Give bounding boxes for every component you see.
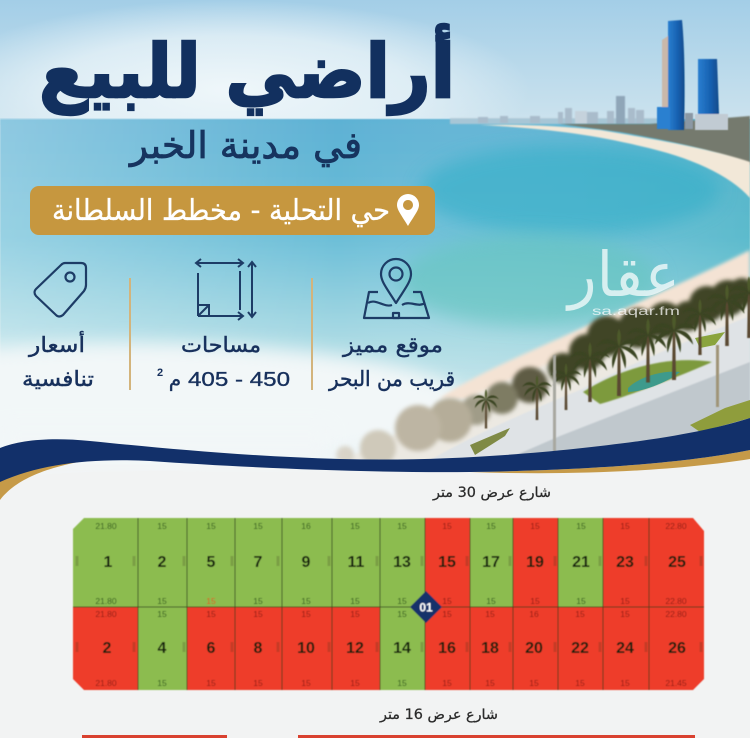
- plot 8: 8: [254, 640, 263, 657]
- plot 13: [380, 518, 425, 607]
- plot 8: [235, 607, 282, 690]
- tall blue tower: [657, 20, 728, 130]
- location pill: [30, 186, 435, 235]
- feature description: قريب من البحر: [328, 367, 455, 391]
- feature: areas: م: [169, 367, 181, 391]
- skyline: [450, 96, 670, 124]
- plot 1: 21.80: [95, 596, 117, 606]
- plot 13: 13: [393, 554, 411, 571]
- plot 7: [235, 518, 282, 607]
- feature description: 405 - 450: [188, 369, 290, 391]
- plot 22: 15: [575, 678, 585, 688]
- plot 25: [649, 518, 704, 607]
- plot 2 top: [138, 518, 187, 607]
- sand under trees: [340, 280, 750, 462]
- plot 9: 15: [301, 596, 311, 606]
- plot 4: 4: [158, 640, 167, 657]
- plot 2 top: 15: [157, 521, 167, 531]
- plot 14: 14: [393, 640, 411, 657]
- plot 2 bottom: 2: [103, 640, 112, 657]
- plot 15: 15: [438, 554, 456, 571]
- street label: 16 m: شارع عرض 16 متر: [379, 707, 498, 723]
- icon: map pin on map: [364, 259, 429, 318]
- plot 20: 20: [525, 640, 543, 657]
- plot 16: 16: [438, 640, 456, 657]
- plot 2 bottom: 21.80: [95, 609, 117, 619]
- plot 7: 15: [253, 521, 263, 531]
- plot 10: 10: [297, 640, 315, 657]
- road: [500, 362, 750, 462]
- plot 9: [282, 518, 332, 607]
- plot 14: 15: [397, 609, 407, 619]
- plot 14: 15: [397, 678, 407, 688]
- plot 16: [425, 607, 470, 690]
- plot map: [73, 518, 704, 690]
- palm trees: [473, 276, 750, 452]
- plot 4: 15: [157, 678, 167, 688]
- plot 26: 21.45: [665, 678, 687, 688]
- plot marker 01: [410, 591, 442, 623]
- promenade land: [430, 316, 750, 462]
- feature: areas: 2: [157, 367, 163, 379]
- divider: [311, 278, 313, 390]
- left fog: [0, 425, 330, 465]
- feature: location: [328, 259, 455, 391]
- plot 24: 24: [616, 640, 634, 657]
- plot 20: [513, 607, 558, 690]
- plot 25: 22.80: [665, 596, 687, 606]
- feature heading: موقع مميز: [342, 333, 443, 357]
- plot 5: 5: [207, 554, 216, 571]
- watermark: عقار: [565, 238, 680, 311]
- plot 24: 15: [620, 609, 630, 619]
- icon: measured plot: [196, 259, 256, 320]
- plot 7: 15: [253, 596, 263, 606]
- plot 24: 15: [620, 678, 630, 688]
- plot 21: [558, 518, 603, 607]
- feature: areas: [157, 259, 290, 391]
- plot 24: [603, 607, 649, 690]
- watermark: sa.aqar.fm: [592, 304, 680, 318]
- plot 11: 15: [350, 596, 360, 606]
- plot 18: 15: [485, 609, 495, 619]
- plot 1: [73, 518, 138, 607]
- plot 12: [332, 607, 380, 690]
- title: أراضي للبيع: [39, 23, 455, 115]
- plot 10: 15: [301, 609, 311, 619]
- lower white panel: [0, 450, 750, 738]
- plot 18: 18: [481, 640, 499, 657]
- sea: [0, 119, 750, 464]
- plot 9: 16: [301, 521, 311, 531]
- plot 11: [332, 518, 380, 607]
- plot 15: 15: [442, 596, 452, 606]
- plot 6: [187, 607, 235, 690]
- north beach: [480, 125, 750, 198]
- sky: [0, 0, 750, 125]
- plot 19: 15: [530, 596, 540, 606]
- plot 2 bottom: [73, 607, 138, 690]
- plot 22: [558, 607, 603, 690]
- plot 4: 15: [157, 609, 167, 619]
- haze behind title: [0, 0, 530, 180]
- plot 19: 19: [526, 554, 544, 571]
- background: coastal photo scene: [0, 0, 750, 467]
- plot 5: [187, 518, 235, 607]
- plot 22: 15: [575, 609, 585, 619]
- south beach: [440, 250, 750, 402]
- plot 12: 12: [346, 640, 364, 657]
- plot 23: [603, 518, 649, 607]
- plot 13: 15: [397, 521, 407, 531]
- feature: prices: [22, 263, 94, 391]
- plot 22: 22: [571, 640, 589, 657]
- second tower: [698, 59, 719, 114]
- plot 16: 15: [442, 609, 452, 619]
- feature heading: مساحات: [181, 333, 261, 357]
- plot 10: 15: [301, 678, 311, 688]
- subtitle: في مدينة الخبر: [128, 124, 362, 167]
- plot 5: 15: [206, 521, 216, 531]
- feature heading: أسعار: [28, 331, 85, 357]
- plot 17: [470, 518, 513, 607]
- plot 12: 15: [350, 609, 360, 619]
- plot 20: 15: [529, 678, 539, 688]
- next plot rows (cropped): [82, 735, 695, 738]
- plot 11: 15: [350, 521, 360, 531]
- plot 2 top: 2: [158, 554, 167, 571]
- garden beds: [583, 360, 712, 404]
- plot 21: 15: [576, 596, 586, 606]
- plot 6: 15: [206, 678, 216, 688]
- plot 6: 15: [206, 609, 216, 619]
- plot 26: 22.80: [665, 609, 687, 619]
- plot 23: 15: [620, 521, 630, 531]
- plot 17: 15: [486, 596, 496, 606]
- plot 6: 6: [207, 640, 216, 657]
- tree canopy: hazy belt: [336, 367, 548, 466]
- plot 15: 15: [442, 521, 452, 531]
- plot 13: 15: [397, 596, 407, 606]
- plot 23: 23: [616, 554, 634, 571]
- plot 2 top: 15: [157, 596, 167, 606]
- plot 11: 11: [348, 554, 365, 571]
- feature description: تنافسية: [22, 367, 94, 391]
- plot 20: 16: [529, 609, 539, 619]
- plot 25: 25: [668, 554, 686, 571]
- pill text: حي التحلية - مخطط السلطانة: [52, 193, 390, 228]
- plot 1: 21.80: [95, 521, 117, 531]
- tree canopy: dark belt: [548, 278, 750, 383]
- icon: location pin: [397, 194, 419, 226]
- plot 26: [649, 607, 704, 690]
- gold ribbon: [0, 450, 750, 500]
- plot 15: [425, 518, 470, 607]
- plot 14: [380, 607, 425, 690]
- plot 21: 21: [572, 554, 590, 571]
- plot 9: 9: [302, 554, 311, 571]
- plot 7: 7: [254, 554, 263, 571]
- divider: [129, 278, 131, 390]
- plot 17: 17: [482, 554, 500, 571]
- plot 21: 15: [576, 521, 586, 531]
- plot 12: 15: [350, 678, 360, 688]
- plot 4: [138, 607, 187, 690]
- plot 1: 1: [104, 554, 113, 571]
- plot 19: [513, 518, 558, 607]
- plot 19: 15: [530, 521, 540, 531]
- plot 26: 26: [668, 640, 686, 657]
- plot 2 bottom: 21.80: [95, 678, 117, 688]
- plot 23: 15: [620, 596, 630, 606]
- plot marker 01: 01: [419, 600, 433, 614]
- plot 8: 15: [253, 678, 263, 688]
- plot 8: 15: [253, 609, 263, 619]
- street label: 30 m: شارع عرض 30 متر: [432, 485, 551, 501]
- plot 18: [470, 607, 513, 690]
- plot 16: 15: [442, 678, 452, 688]
- land strip behind north beach: [560, 116, 750, 165]
- plot 10: [282, 607, 332, 690]
- icon: price tag: [34, 263, 86, 316]
- plot 5: 15: [206, 596, 216, 606]
- plot 25: 22.80: [665, 521, 687, 531]
- navy ribbon: [0, 418, 750, 482]
- plot 17: 15: [486, 521, 496, 531]
- wave band: navy and gold ribbon: [0, 418, 750, 500]
- plot 18: 15: [485, 678, 495, 688]
